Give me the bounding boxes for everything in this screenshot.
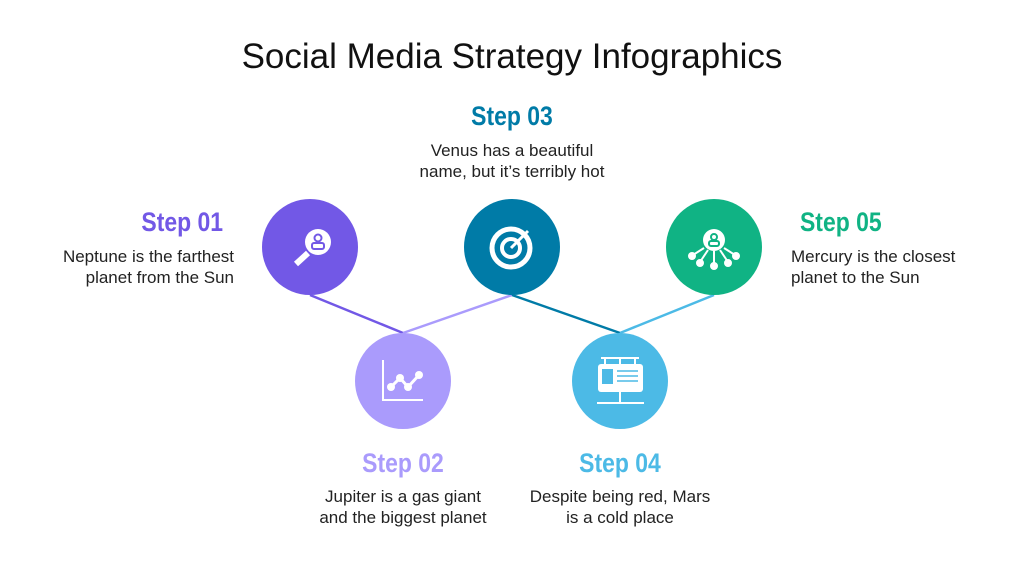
title: Social Media Strategy Infographics: [242, 37, 782, 76]
step 02 heading: Step 02: [362, 448, 444, 478]
icon circle: step 04: [572, 333, 668, 429]
step 01 heading: Step 01: [141, 207, 223, 237]
step 04 text: Despite being red, Mars: [530, 487, 710, 506]
step 04 text: [530, 487, 710, 527]
icon circle: step 02: [355, 333, 451, 429]
step 04 text: is a cold place: [566, 508, 674, 527]
icon circle: step 05: [666, 199, 762, 295]
step 01 text: planet from the Sun: [86, 268, 234, 287]
step 03 text: [420, 141, 604, 181]
step 01 text: Neptune is the farthest: [63, 247, 234, 266]
step 03 text: Venus has a beautiful: [431, 141, 593, 160]
step 02 text: [319, 487, 487, 527]
step 05 text: planet to the Sun: [791, 268, 920, 287]
step 02 text: Jupiter is a gas giant: [325, 487, 481, 506]
step 05 text: Mercury is the closest: [791, 247, 955, 266]
step 03 heading: Step 03: [471, 101, 553, 131]
step 05 heading: Step 05: [800, 207, 882, 237]
step 04 heading: Step 04: [579, 448, 661, 478]
step 01 text: [63, 247, 234, 287]
step 02 text: and the biggest planet: [319, 508, 487, 527]
step 03 text: name, but it’s terribly hot: [420, 162, 604, 181]
icon circle: step 01: [262, 199, 358, 295]
step 05 text: [791, 247, 956, 287]
icon circle: step 03: [464, 199, 560, 295]
